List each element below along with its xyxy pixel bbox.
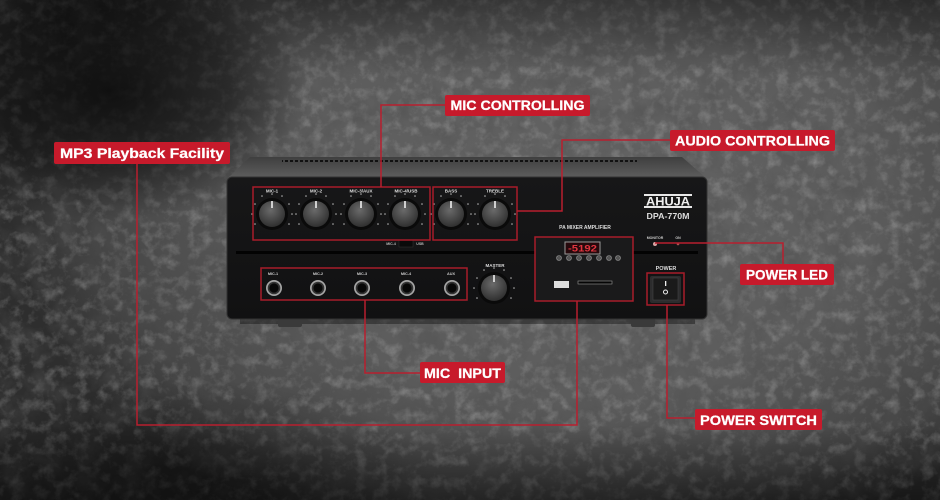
knob: MIC-4/USB <box>384 188 426 230</box>
knob: MIC-1 <box>251 188 293 230</box>
SD card slot <box>578 281 612 284</box>
panel groove <box>236 251 698 254</box>
knob: MIC-2: MIC-2 <box>310 188 323 194</box>
MP3 player module <box>535 237 633 301</box>
label: MIC INPUT <box>420 362 505 383</box>
jack: MIC-3: MIC-3 <box>357 272 367 276</box>
connector: MIC input <box>365 300 421 373</box>
knob: BASS <box>430 188 472 230</box>
amplifier <box>227 157 707 327</box>
MP3 player module: -5192 <box>568 244 597 254</box>
jack: MIC-2 <box>310 272 326 296</box>
knob: TREBLE: TREBLE <box>486 188 504 194</box>
jack: MIC-1 <box>266 272 282 296</box>
label: POWER SWITCH: POWER SWITCH <box>700 413 817 428</box>
connector: MIC controlling <box>381 105 446 187</box>
label: MP3 Playback Facility: MP3 Playback Facility <box>60 146 225 161</box>
amplifier front panel <box>227 177 707 319</box>
knob: MIC-4/USB: MIC-4/USB <box>394 188 418 194</box>
jack: MIC-4 <box>399 272 415 296</box>
label: AUDIO CONTROLLING <box>670 130 835 151</box>
connector: power switch <box>667 305 696 418</box>
knob: MIC-3/AUX <box>340 188 382 230</box>
label: MIC INPUT: MIC INPUT <box>424 366 502 381</box>
power rocker switch <box>650 266 681 303</box>
red highlight boxes <box>253 187 684 305</box>
label: POWER LED <box>740 264 834 285</box>
knob: MASTER: MASTER <box>486 263 505 268</box>
selector switch <box>386 240 424 247</box>
connector: MP3 playback <box>137 163 577 425</box>
selector switch: USB <box>416 242 424 246</box>
jack: AUX: AUX <box>447 272 455 276</box>
indicator LEDs: ON <box>675 236 681 240</box>
brand logo: AHUJA DPA-770M: AHUJA <box>646 194 690 208</box>
jack: MIC-2: MIC-2 <box>313 272 323 276</box>
connector: power LED <box>655 243 783 265</box>
USB port <box>554 281 569 288</box>
connector: audio controlling <box>517 140 671 211</box>
knob: MASTER <box>473 263 515 304</box>
indicator LEDs <box>647 236 681 246</box>
jack: MIC-1: MIC-1 <box>268 272 278 276</box>
knob: MIC-1: MIC-1 <box>266 188 279 194</box>
label: MP3 Playback Facility <box>54 142 230 164</box>
indicator LEDs: MONITOR <box>647 236 664 240</box>
model name: PA mixer amplifier: PA MIXER AMPLIFIER <box>559 225 611 231</box>
jack: MIC-3 <box>354 272 370 296</box>
jack: AUX <box>444 272 460 296</box>
LED display <box>565 242 600 254</box>
knob: TREBLE <box>474 188 516 230</box>
label: AUDIO CONTROLLING: AUDIO CONTROLLING <box>675 134 830 148</box>
selector switch: MIC-4 <box>386 242 396 246</box>
knob: BASS: BASS <box>445 188 457 194</box>
amplifier feet <box>278 317 655 327</box>
power rocker switch: POWER <box>656 266 676 272</box>
label: MIC CONTROLLING <box>445 95 590 116</box>
amplifier shadow <box>240 318 695 324</box>
MP3 buttons <box>556 256 620 260</box>
brand logo: AHUJA DPA-770M: DPA-770M <box>646 211 690 221</box>
label: POWER SWITCH <box>695 409 822 430</box>
jack: MIC-4: MIC-4 <box>401 272 412 276</box>
knob: MIC-2 <box>295 188 337 230</box>
knob: MIC-3/AUX: MIC-3/AUX <box>349 188 373 194</box>
label: POWER LED: POWER LED <box>746 268 828 282</box>
label: MIC CONTROLLING: MIC CONTROLLING <box>450 98 584 113</box>
brand logo: AHUJA DPA-770M <box>644 194 692 221</box>
amplifier top cover <box>228 157 706 178</box>
